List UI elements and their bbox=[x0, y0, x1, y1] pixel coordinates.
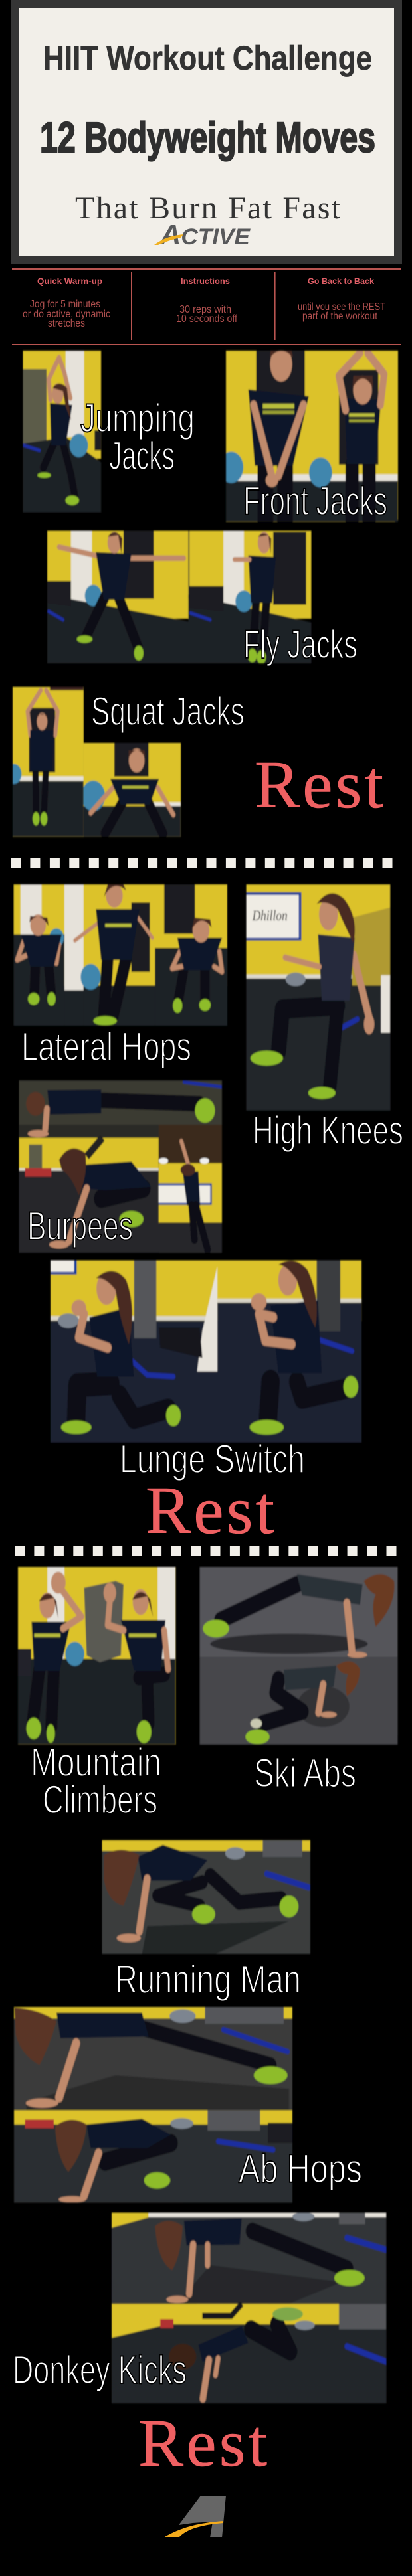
logo: ACTIVE wordmark: ACTIVE bbox=[159, 219, 251, 250]
panel: running man bbox=[102, 1840, 310, 1954]
column: quick warm-up: or do active, dynamic bbox=[23, 309, 110, 320]
labels: second circuit exercises: Lateral Hops bbox=[21, 1024, 191, 1069]
photo: lunge switch bbox=[49, 1259, 363, 1657]
photo: front jacks bbox=[225, 349, 399, 1658]
labels: second circuit exercises: Burpees bbox=[27, 1204, 133, 1248]
subtitle: That Burn Fat Fast: That Burn Fat Fast bbox=[75, 191, 341, 226]
photo: ski abs bbox=[199, 1566, 399, 1746]
labels: jacks exercises: Jacks bbox=[109, 434, 175, 478]
column: go back to back: until you see the REST bbox=[298, 301, 385, 313]
panel: title header bbox=[11, 0, 402, 264]
labels: second circuit exercises: Lunge Switch bbox=[120, 1437, 305, 1481]
column: instructions: 30 reps with bbox=[179, 304, 231, 315]
photo: ab hops bbox=[13, 1657, 397, 2204]
labels: jacks exercises: Squat Jacks bbox=[91, 689, 245, 734]
labels: jacks exercises: Fly Jacks bbox=[243, 622, 358, 667]
divider: squares row 2 bbox=[15, 1546, 396, 1556]
column: instructions: 10 seconds off bbox=[176, 313, 238, 325]
photo: fly jacks bbox=[47, 530, 312, 665]
column: instructions: Instructions bbox=[181, 276, 230, 286]
logo: ACTIVE A mark bbox=[163, 2496, 226, 2537]
column: go back to back: part of the workout bbox=[302, 311, 378, 322]
photo: squat jacks squat bbox=[82, 742, 182, 838]
photo: running man bbox=[101, 1839, 311, 1955]
photo: mountain climbers bbox=[17, 1566, 177, 1746]
panel: second circuit photos bbox=[14, 884, 390, 1443]
labels: mountain climbers and ski abs bbox=[31, 1740, 356, 1822]
labels: second circuit exercises bbox=[21, 1024, 403, 1481]
photo: high knees: Dhillon bbox=[252, 908, 288, 924]
labels: mountain climbers and ski abs: Climbers bbox=[43, 1777, 157, 1822]
panel: instructions strip bbox=[12, 268, 401, 345]
photo: donkey kicks bbox=[111, 1656, 395, 2405]
heading: rest 2: Rest bbox=[146, 1473, 274, 1548]
column: instructions bbox=[176, 276, 238, 325]
column: quick warm-up: stretches bbox=[48, 318, 85, 329]
column: go back to back bbox=[298, 276, 385, 322]
labels: ab hops and donkey kicks bbox=[13, 2146, 362, 2392]
column: go back to back: Go Back to Back bbox=[308, 276, 374, 286]
photo: squat jacks standing bbox=[12, 686, 326, 1658]
labels: mountain climbers and ski abs: Mountain bbox=[31, 1740, 161, 1785]
panel: third circuit photos top bbox=[18, 1567, 397, 1745]
labels: mountain climbers and ski abs: Ski Abs bbox=[254, 1751, 356, 1795]
photo: jumping jacks bbox=[22, 349, 397, 1658]
column: quick warm-up bbox=[23, 276, 110, 329]
heading: rest 3: Rest bbox=[138, 2406, 267, 2481]
photo: lateral hops bbox=[13, 883, 228, 1027]
column: quick warm-up: Jog for 5 minutes bbox=[30, 299, 100, 310]
labels: ab hops and donkey kicks: Ab Hops bbox=[239, 2146, 362, 2191]
panel: jacks photos bbox=[6, 347, 398, 837]
labels: jacks exercises: Jumping bbox=[80, 396, 195, 440]
divider: squares row 1 bbox=[11, 858, 392, 868]
labels: jacks exercises bbox=[80, 396, 387, 734]
heading: rest 1: Rest bbox=[255, 748, 383, 823]
panel: ab hops and donkey kicks bbox=[14, 2007, 386, 2403]
column: quick warm-up: Quick Warm-up bbox=[37, 276, 102, 286]
label: running man: Running Man bbox=[115, 1957, 301, 2002]
photo: burpees bbox=[19, 1080, 397, 1658]
labels: ab hops and donkey kicks: Donkey Kicks bbox=[13, 2348, 187, 2392]
photo: high knees bbox=[245, 883, 391, 1111]
